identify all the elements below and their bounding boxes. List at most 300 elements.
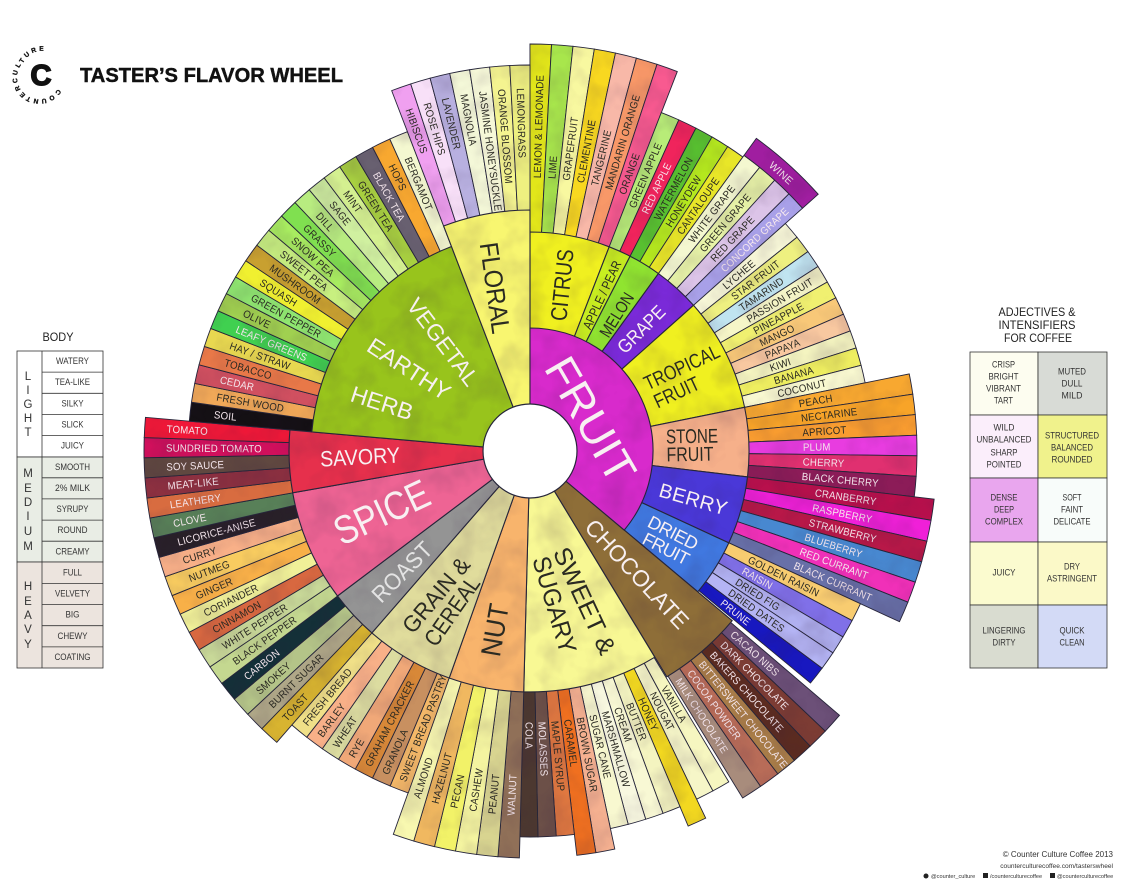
spoke: white pepper: WHITE PEPPER — [221, 602, 290, 652]
spokes: nut — [393, 448, 541, 858]
spoke: toast: TOAST — [281, 692, 311, 724]
panel: body table — [17, 351, 103, 668]
body level: medium: I — [26, 511, 30, 523]
cell: muted: DULL — [1062, 378, 1082, 390]
body level: medium: E — [24, 483, 32, 495]
cell: crisp — [970, 352, 1038, 415]
spoke: cacao nibs: CACAO NIBS — [728, 630, 781, 679]
body descriptors: SMOOTH — [55, 462, 90, 473]
spoke: bittersweet chocolate — [522, 444, 794, 774]
spoke: black cherry: BLACK CHERRY — [801, 472, 879, 490]
spoke: nectarine: NECTARINE — [800, 407, 858, 425]
label: sweet and sugary: SWEET & — [547, 543, 621, 659]
spoke: bergamot — [390, 132, 539, 455]
spoke: olive: OLIVE — [241, 308, 272, 332]
label: stone fruit: FRUIT — [666, 444, 714, 466]
spoke: lavender: LAVENDER — [439, 97, 462, 151]
spoke: mint — [324, 167, 538, 457]
cell: soft: FAINT — [1061, 504, 1083, 516]
spokes: citrus — [519, 44, 677, 455]
spoke: marshmallow: MARSHMALLOW — [599, 710, 631, 789]
spoke: green pepper — [226, 277, 535, 459]
spoke: pineapple — [526, 282, 836, 459]
spoke: fresh wood: FRESH WOOD — [215, 392, 285, 415]
spoke: red currant: RED CURRANT — [798, 547, 869, 582]
spoke: honey: HONEY — [635, 696, 660, 733]
spoke: cantaloupe — [522, 146, 743, 456]
spoke: meat-like — [145, 441, 531, 498]
spoke: snow pea — [269, 216, 536, 458]
spoke: raspberry — [528, 441, 931, 541]
cell: soft: DELICATE — [1054, 516, 1090, 528]
label: dried fruit: DRIED — [644, 512, 702, 554]
spoke: cola: COLA — [522, 722, 534, 749]
spoke: red apple: RED APPLE — [640, 161, 675, 216]
spoke: vanilla: VANILLA — [658, 684, 688, 725]
spoke: lavender — [430, 73, 540, 453]
spoke: barley — [307, 445, 538, 749]
spoke: raisin: RAISIN — [740, 566, 774, 592]
cell: quick — [1038, 605, 1107, 668]
spoke: honeydew: HONEYDEW — [664, 174, 705, 230]
body level: heavy: A — [24, 610, 32, 622]
spoke: coconut — [528, 365, 865, 460]
spoke: strawberry — [527, 441, 927, 562]
spoke: lime — [519, 44, 573, 452]
heading: adjectives and intensifiers: ADJECTIVES & — [998, 305, 1076, 319]
spoke: brown sugar: BROWN SUGAR — [573, 716, 599, 793]
spoke: green apple — [521, 112, 679, 455]
spoke: kiwi: KIWI — [769, 357, 793, 375]
spoke: concord grape — [523, 194, 803, 458]
spoke: graham cracker — [355, 447, 539, 778]
body descriptors: VELVETY — [55, 588, 91, 600]
label: apple / pear: APPLE / PEAR — [580, 258, 624, 332]
spoke: cocoa powder: COCOA POWDER — [684, 668, 743, 742]
spoke: red apple — [521, 120, 696, 455]
spoke: passion fruit — [525, 266, 827, 459]
spoke: dill — [295, 190, 537, 457]
body level: heavy: V — [24, 624, 32, 636]
spoke: mushroom — [246, 245, 536, 459]
spoke: peach — [528, 374, 913, 461]
spoke: milk chocolate — [521, 445, 761, 798]
spoke: leathery: LEATHERY — [169, 493, 222, 512]
spoke: green grape: GREEN GRAPE — [698, 192, 754, 255]
spoke: black currant — [526, 441, 908, 622]
spoke: cola — [520, 451, 539, 837]
spokes: sweet and sugary — [520, 446, 729, 855]
body descriptors: JUICY — [61, 441, 85, 452]
cell: muted: MUTED — [1058, 366, 1086, 378]
spoke: honey — [521, 447, 706, 826]
spoke: mango: MANGO — [758, 323, 797, 349]
cell: dense: DEEP — [994, 504, 1014, 516]
spoke: peanut: PEANUT — [487, 773, 503, 815]
spoke: cedar — [195, 365, 532, 460]
body level: medium: M — [23, 468, 33, 480]
body descriptors: WATERY — [56, 356, 90, 367]
spoke: leafy greens: LEAFY GREENS — [234, 325, 308, 364]
spoke: banana: BANANA — [773, 365, 815, 387]
spokes: melon — [522, 128, 743, 456]
body descriptors: TEA-LIKE — [55, 377, 90, 388]
spoke: cream — [521, 448, 663, 819]
spoke: tobacco — [199, 346, 533, 460]
spoke: nougat — [522, 447, 713, 799]
spoke: cedar: CEDAR — [219, 375, 255, 394]
cell: lingering: LINGERING — [982, 626, 1026, 636]
label: savory: SAVORY — [319, 442, 401, 472]
spoke: pineapple: PINEAPPLE — [752, 301, 806, 337]
block: wine — [742, 137, 820, 210]
cell: lingering — [970, 605, 1038, 668]
spoke: raisin — [525, 443, 852, 637]
spoke: golden raisin: GOLDEN RAISIN — [746, 555, 821, 600]
spoke: orange — [520, 64, 677, 455]
spoke: sweet pea — [257, 230, 536, 458]
body descriptors: 2% MILK — [55, 483, 91, 494]
spokes: apple and pear — [521, 112, 696, 455]
spoke: cinnamon: CINNAMON — [211, 600, 264, 636]
spoke: star fruit: STAR FRUIT — [730, 259, 783, 303]
spoke: plum: PLUM — [803, 442, 831, 454]
cell: wild: UNBALANCED — [976, 434, 1032, 446]
label: berry: BERRY — [656, 480, 730, 520]
spoke: cantaloupe: CANTALOUPE — [676, 176, 723, 237]
spoke: pecan — [434, 449, 541, 851]
spoke: vanilla — [522, 446, 729, 791]
cell: dense: DENSE — [990, 492, 1018, 504]
spoke: meat-like: MEAT-LIKE — [167, 476, 220, 493]
spoke: white grape: WHITE GRAPE — [687, 183, 738, 246]
spoke: soil — [189, 402, 531, 460]
label: vegetal earthy herb: VEGETAL — [402, 293, 484, 391]
spoke: molasses — [521, 451, 556, 837]
spoke: red grape — [523, 180, 789, 458]
spoke: concord grape: CONCORD GRAPE — [719, 206, 792, 275]
spoke: clementine — [519, 49, 616, 453]
spokes: berry — [526, 440, 934, 622]
spoke: toast — [262, 444, 537, 742]
spoke: banana — [528, 348, 861, 460]
spoke: coriander — [180, 442, 535, 632]
spokes: roast — [222, 443, 537, 742]
spoke: lemon and lemonade — [519, 44, 551, 451]
spoke: apricot — [529, 415, 917, 461]
spoke: prune — [524, 444, 822, 683]
spoke: dried fig — [525, 443, 843, 653]
cell: soft — [1038, 478, 1107, 542]
label: vegetal earthy herb: HERB — [348, 381, 416, 425]
cell: juicy — [970, 542, 1038, 605]
spoke: peach: PEACH — [798, 393, 834, 410]
body descriptors: BIG — [66, 610, 80, 621]
spoke: nutmeg: NUTMEG — [187, 559, 232, 585]
spoke: black pepper — [210, 443, 536, 683]
spoke: grassy: GRASSY — [300, 223, 338, 260]
label: grain and cereal: GRAIN & — [397, 552, 475, 638]
spoke: coriander: CORIANDER — [202, 583, 261, 620]
spoke: burnt sugar — [248, 444, 537, 729]
spoke: carbon: CARBON — [242, 648, 283, 683]
label: citrus: CITRUS — [545, 248, 579, 322]
spoke: snow pea: SNOW PEA — [288, 236, 336, 280]
spoke: cream: CREAM — [611, 706, 633, 744]
spoke: olive — [218, 294, 534, 460]
body level: heavy: H — [24, 581, 32, 593]
spoke: cashew — [455, 449, 541, 855]
spoke: plum — [530, 435, 917, 461]
spoke: ginger: GINGER — [194, 576, 235, 602]
label: roast: ROAST — [366, 536, 438, 608]
spoke: bergamot: BERGAMOT — [401, 156, 434, 212]
spoke: prune: PRUNE — [718, 598, 752, 628]
spoke: passion fruit: PASSION FRUIT — [745, 277, 816, 326]
spoke: squash: SQUASH — [257, 278, 299, 310]
label: grain and cereal: CEREAL — [419, 571, 485, 651]
segments: category wheel — [289, 210, 749, 692]
footer credits: © Counter Culture Coffee 2013 — [1003, 850, 1114, 859]
spoke: caramel: CARAMEL — [561, 719, 579, 768]
label: dried fruit: FRUIT — [639, 529, 693, 569]
spoke: butter — [522, 448, 680, 813]
footer credits: /counterculturecoffee — [990, 874, 1042, 880]
spoke: black tea: BLACK TEA — [370, 171, 406, 224]
spoke: dark chocolate — [522, 443, 825, 746]
spoke: lemongrass: LEMONGRASS — [514, 88, 527, 158]
body descriptors — [54, 356, 91, 663]
spoke: smokey — [234, 443, 537, 714]
spoke: dill: DILL — [313, 211, 336, 234]
spoke: black currant: BLACK CURRANT — [792, 561, 873, 604]
spoke: jasmine honeysuckle — [470, 67, 540, 452]
spoke: mushroom: MUSHROOM — [267, 263, 322, 307]
cell: wild: SHARP — [990, 448, 1018, 458]
body descriptors: SILKY — [62, 398, 84, 409]
spoke: bittersweet chocolate: BITTERSWEET CHOCOLATE — [696, 659, 789, 771]
spoke: curry: CURRY — [181, 545, 218, 567]
spoke: sundried tomato — [144, 438, 530, 461]
spoke: cranberry — [528, 440, 934, 520]
body descriptors: FULL — [63, 567, 82, 578]
spoke: pecan: PECAN — [449, 774, 467, 809]
label: stone fruit: STONE — [666, 426, 718, 448]
cell: quick: CLEAN — [1060, 638, 1085, 648]
body descriptors: CHEWY — [58, 631, 88, 642]
spokes: savory — [144, 417, 531, 518]
spoke: hay / straw — [204, 328, 533, 460]
body level: light: T — [24, 427, 32, 439]
spoke: wheat: WHEAT — [331, 715, 360, 750]
cell: soft: SOFT — [1062, 492, 1082, 504]
body descriptors: SLICK — [62, 420, 84, 430]
spoke: soy sauce: SOY SAUCE — [166, 460, 224, 474]
spoke: tobacco: TOBACCO — [223, 358, 273, 382]
spoke: coconut: COCONUT — [776, 378, 828, 400]
cell: crisp: TART — [994, 396, 1013, 406]
spoke: rye — [338, 446, 538, 769]
spoke: licorice-anise: LICORICE-ANISE — [176, 518, 257, 549]
spoke: burnt sugar: BURNT SUGAR — [267, 652, 327, 711]
spoke: honeydew — [522, 137, 728, 456]
spoke: star fruit — [525, 237, 808, 458]
spoke: tomato: TOMATO — [166, 424, 208, 438]
spoke: tangerine — [520, 53, 636, 454]
panel: adjectives table — [970, 352, 1107, 668]
spoke: dark chocolate: DARK CHOCOLATE — [718, 640, 790, 713]
spoke: cranberry: CRANBERRY — [814, 488, 877, 508]
body level: heavy — [24, 581, 32, 651]
body level: light — [24, 371, 33, 439]
spoke: blueberry: BLUEBERRY — [803, 532, 864, 561]
spoke: hazelnut: HAZELNUT — [431, 752, 455, 805]
spoke: clove — [150, 441, 532, 538]
spoke: hay / straw: HAY / STRAW — [228, 341, 292, 373]
heading: adjectives and intensifiers: FOR COFFEE — [1004, 331, 1072, 345]
cell: structured: BALANCED — [1051, 442, 1093, 454]
spoke: fresh bread — [292, 445, 537, 737]
spoke: ginger — [172, 442, 534, 614]
spoke: sundried tomato: SUNDRIED TOMATO — [166, 443, 262, 455]
cell: lingering: DIRTY — [992, 638, 1016, 648]
logo: Counter Culture: C — [31, 60, 52, 92]
spoke: dried dates: DRIED DATES — [726, 588, 786, 635]
spoke: hops — [373, 139, 539, 455]
spoke: hops: HOPS — [385, 163, 408, 193]
spoke: fresh bread: FRESH BREAD — [301, 667, 355, 729]
spoke: soy sauce — [144, 441, 530, 478]
spokes: tropical fruit — [524, 223, 865, 460]
spoke: peanut — [477, 450, 541, 857]
spoke: lemongrass — [510, 65, 540, 451]
spoke: maple syrup: MAPLE SYRUP — [548, 720, 566, 792]
spoke: cocoa powder — [521, 445, 778, 787]
heading: adjectives and intensifiers: INTENSIFIERS — [998, 318, 1076, 332]
spoke: nougat: NOUGAT — [647, 691, 676, 733]
spoke: brown sugar — [521, 449, 615, 853]
spoke: lychee — [524, 223, 797, 458]
spoke: magnolia — [450, 70, 540, 453]
spoke: watermelon — [522, 128, 712, 455]
center hole — [483, 404, 577, 498]
label: chocolate: CHOCOLATE — [580, 514, 694, 634]
label: dried fruit — [639, 512, 702, 569]
label: vegetal earthy herb: EARTHY — [363, 332, 455, 406]
spoke: grassy — [281, 202, 537, 458]
cell: wild: POINTED — [986, 460, 1022, 470]
spoke: graham cracker: GRAHAM CRACKER — [364, 679, 417, 769]
spoke: papaya — [527, 314, 850, 459]
spoke: sugar cane — [521, 449, 628, 829]
spoke: cashew: CASHEW — [468, 768, 486, 813]
spoke: green tea — [340, 157, 538, 456]
spoke: green apple: GREEN APPLE — [628, 141, 665, 210]
spokes: dried fruit — [524, 443, 861, 683]
spoke: rye: RYE — [347, 737, 367, 760]
spoke: mandarin orange: MANDARIN ORANGE — [604, 93, 643, 191]
spoke: sage: SAGE — [326, 200, 352, 228]
spoke: carbon — [222, 443, 536, 699]
spoke: lychee: LYCHEE — [721, 258, 758, 292]
heading: body: BODY — [42, 332, 74, 344]
body level: medium: D — [24, 497, 32, 509]
spoke: lemon and lemonade: LEMON & LEMONADE — [533, 75, 547, 178]
spoke: mandarin orange — [520, 58, 657, 454]
cell: crisp: VIBRANT — [986, 384, 1021, 394]
label: spice: SPICE — [327, 472, 437, 554]
label: floral: FLORAL — [474, 240, 516, 336]
spoke: cinnamon — [189, 442, 535, 650]
spoke: magnolia: MAGNOLIA — [457, 93, 478, 147]
body level: light: G — [24, 399, 33, 411]
spoke: golden raisin — [526, 443, 861, 621]
spoke: raspberry: RASPBERRY — [811, 503, 873, 526]
spoke: mint: MINT — [340, 189, 364, 216]
spoke: sweet bread pastry — [390, 448, 539, 793]
category labels — [319, 240, 730, 659]
title: TASTER’S FLAVOR WHEEL — [80, 64, 343, 87]
heading: adjectives and intensifiers — [998, 305, 1076, 345]
footer credits: counterculturecoffee.com/tasterswheel — [1000, 863, 1114, 870]
cell: dense — [970, 478, 1038, 542]
cell: dry: ASTRINGENT — [1047, 574, 1097, 584]
spoke: molasses: MOLASSES — [535, 722, 549, 777]
spokes: chocolate — [521, 443, 840, 798]
spokes: floral — [392, 65, 540, 454]
footer credits: @counter_culture — [931, 874, 975, 880]
spoke: black pepper: BLACK PEPPER — [231, 615, 299, 668]
spoke: kiwi — [527, 331, 856, 460]
spoke: smokey: SMOKEY — [254, 661, 294, 697]
spoke: wheat — [322, 446, 538, 759]
spoke: cherry: CHERRY — [803, 457, 845, 470]
spoke: maple syrup — [521, 450, 574, 836]
spoke: granola: GRANOLA — [381, 728, 411, 777]
cell: crisp: CRISP — [992, 360, 1015, 370]
spoke: orange blossom — [490, 65, 540, 452]
label: grape: GRAPE — [614, 302, 670, 358]
spoke: hibiscus — [392, 84, 540, 454]
spoke: green pepper: GREEN PEPPER — [249, 293, 323, 341]
spoke: leafy greens — [211, 311, 534, 460]
spokes: vegetal, earthy, herb — [189, 132, 539, 460]
spoke: fresh wood — [191, 383, 532, 460]
label: vegetal earthy herb — [348, 293, 484, 425]
spoke: orange: ORANGE — [618, 152, 643, 196]
body level: heavy: Y — [24, 639, 32, 651]
spoke: grapefruit: GRAPEFRUIT — [561, 116, 581, 181]
icon: twitter — [924, 874, 928, 878]
label: melon: MELON — [596, 289, 638, 341]
spoke: red grape: RED GRAPE — [709, 214, 758, 265]
cell: structured — [1038, 415, 1107, 478]
cell: crisp: BRIGHT — [988, 372, 1019, 382]
label: nut: NUT — [475, 601, 515, 659]
cell: juicy: JUICY — [992, 568, 1016, 578]
body descriptors: COATING — [54, 652, 90, 663]
spoke: leathery — [147, 441, 531, 518]
footer credits: @counterculturecoffee — [1057, 874, 1113, 880]
spoke: caramel — [520, 450, 596, 855]
spoke: clementine: CLEMENTINE — [576, 119, 599, 184]
spoke: walnut: WALNUT — [506, 774, 520, 816]
logo: Counter Culture: COUNTERCULTURE — [12, 46, 61, 104]
cell: dry — [1038, 542, 1107, 605]
cell: dense: COMPLEX — [985, 516, 1024, 528]
spoke: sage — [309, 178, 537, 457]
spoke: curry — [159, 441, 533, 577]
